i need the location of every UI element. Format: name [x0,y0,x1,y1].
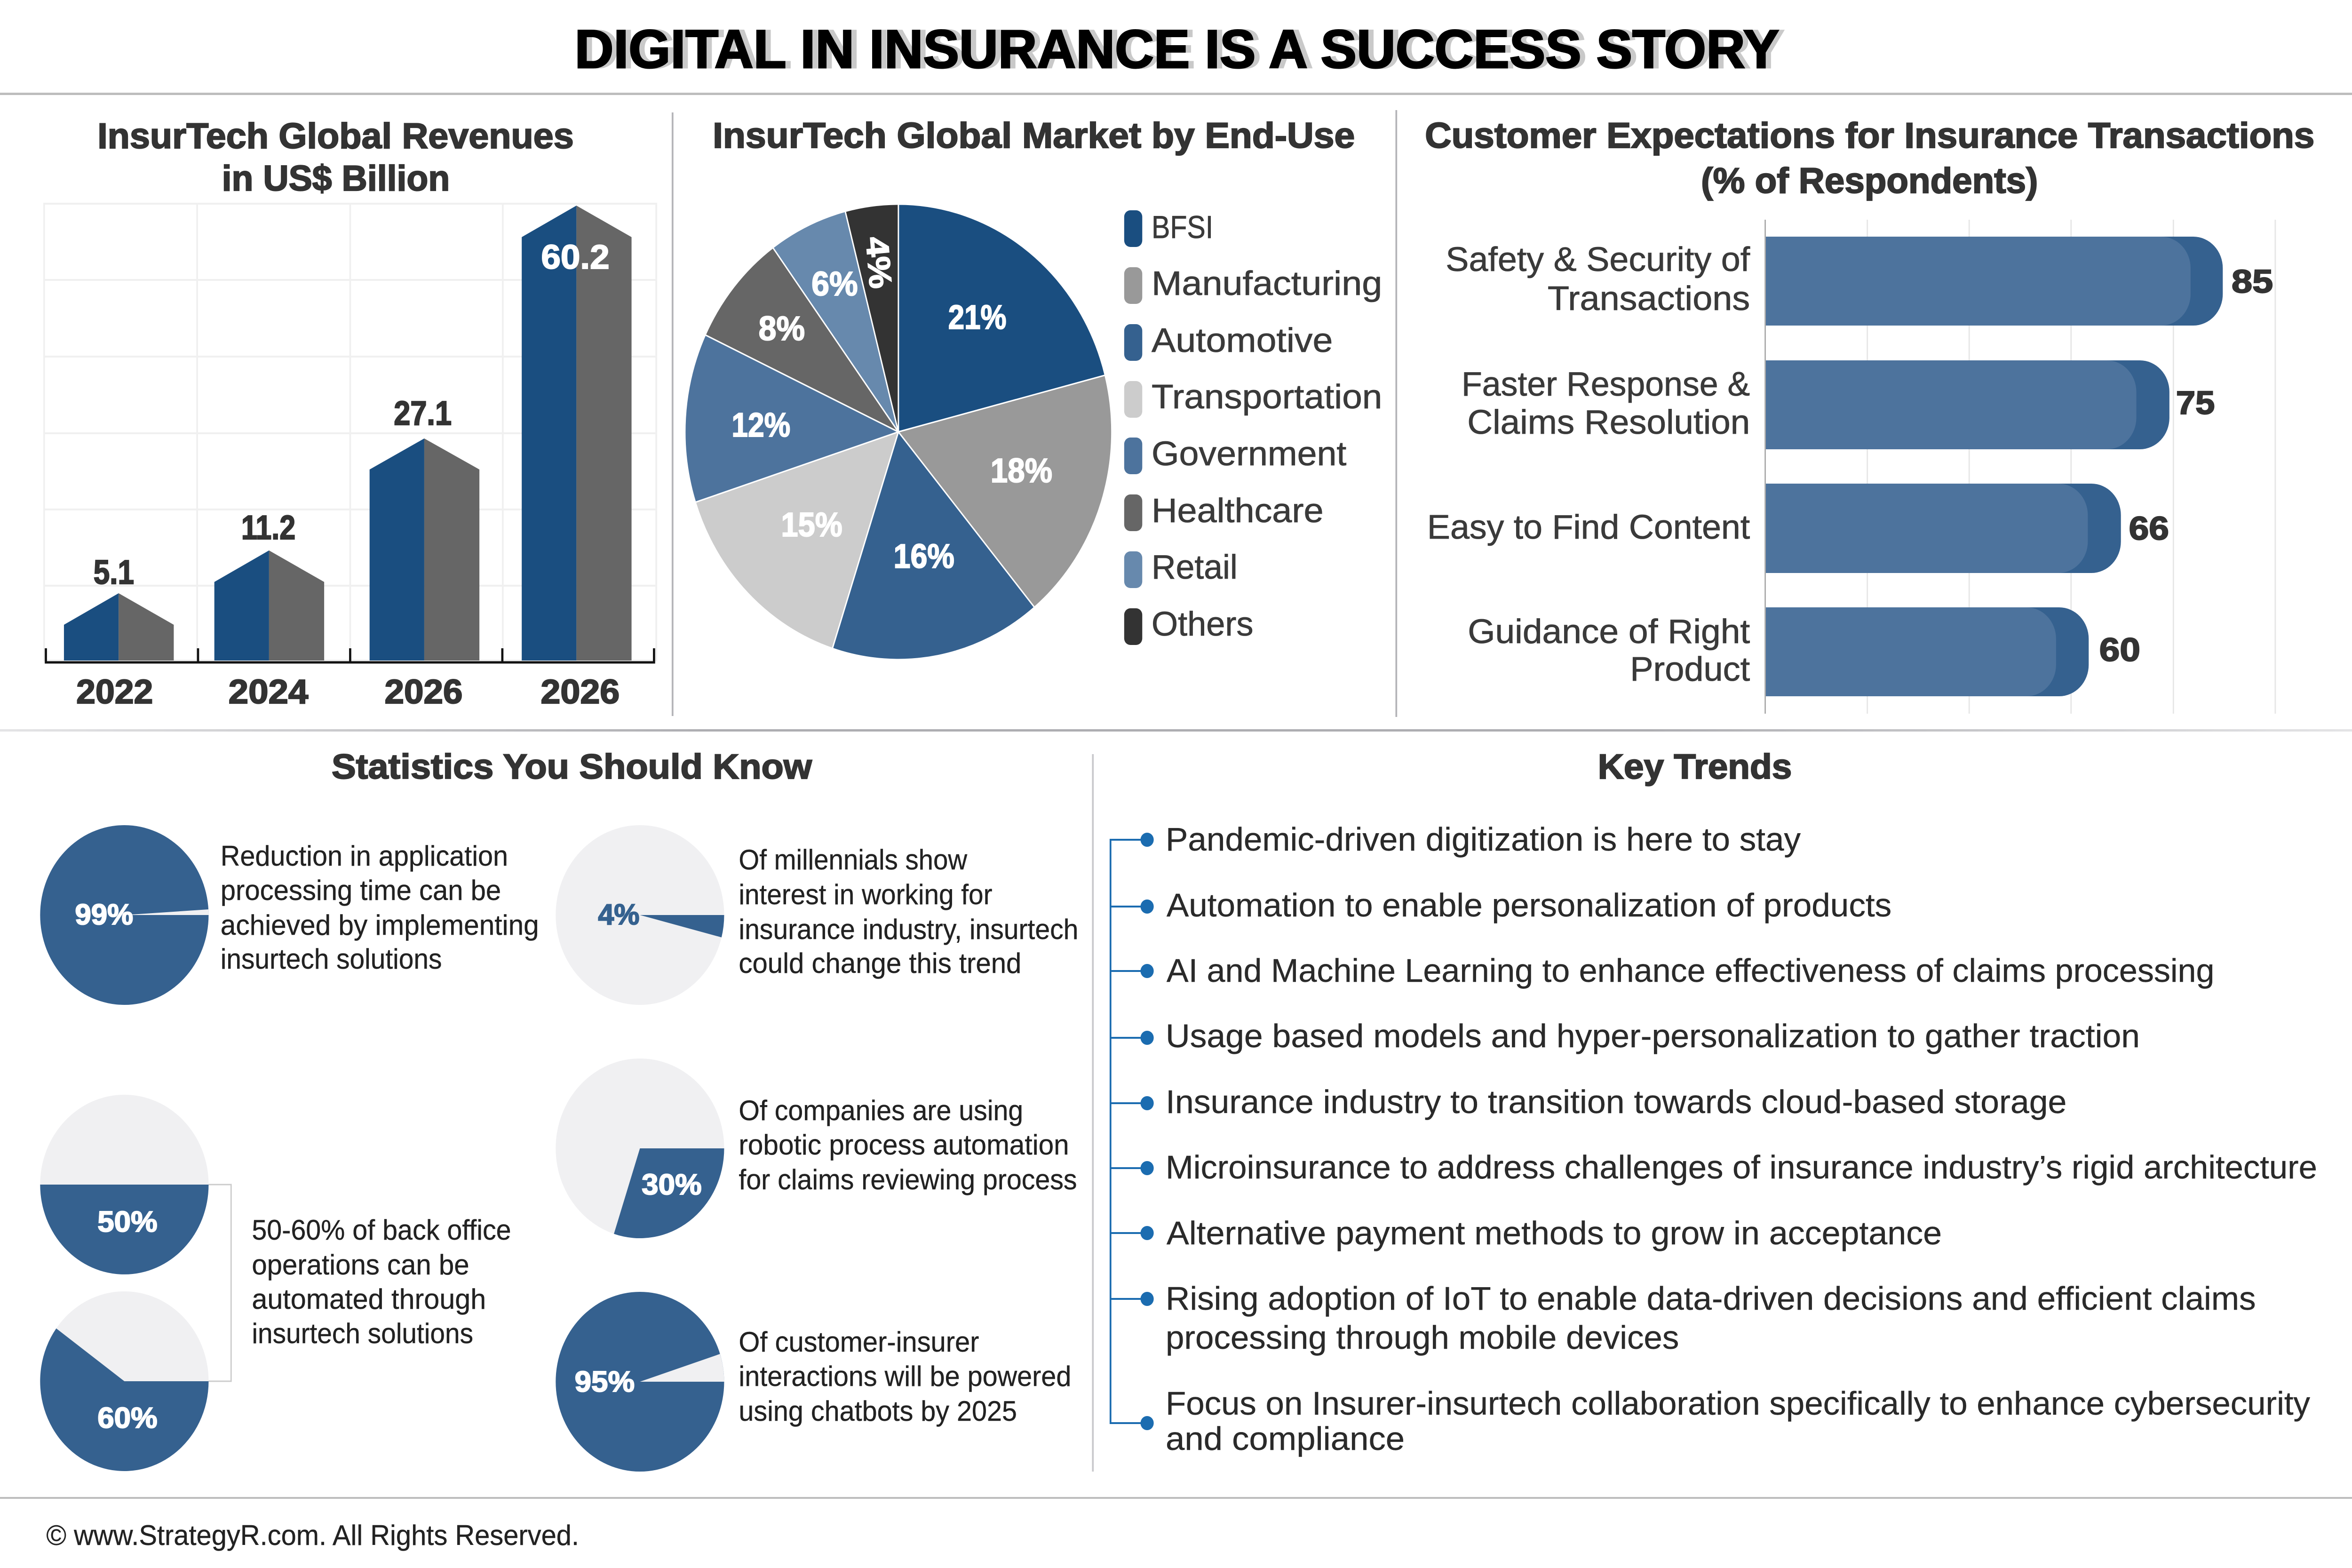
bar category labels: Claims Resolution [1467,403,1750,441]
trend list: and compliance [1166,1421,1405,1457]
panel: market by end-use [685,115,1382,660]
bar chart: revenues: 2026 [540,673,620,710]
bar category labels [1427,240,1750,688]
bar chart: revenues: 5.1 [94,553,134,591]
title: DIGITAL IN INSURANCE IS A SUCCESS STORY [575,19,1779,80]
stat: 95%: using chatbots by 2025 [739,1395,1017,1427]
stat: 95%: Of customer-insurer [739,1326,979,1358]
legend: BFSI [1152,209,1213,245]
horizontal bar chart: 75 [2176,385,2215,421]
bar category labels: Transactions [1548,279,1750,317]
pie labels: 6% [811,265,858,302]
panel: InsurTech global revenues [44,116,656,710]
heading: revenues [97,116,574,199]
footer copyright: © www.StrategyR.com. All Rights Reserved. [46,1520,579,1551]
stat: 95%: interactions will be powered [739,1361,1071,1392]
bar chart: revenues [46,206,654,710]
stat: 95% [556,1292,1071,1472]
stat: 4%: Of millennials show [739,844,968,876]
legend [1124,209,1382,645]
pie chart: end-use [685,204,1112,660]
stat: 99%: 99% [75,898,133,931]
stat: 4%: interest in working for [739,879,993,910]
bar chart: revenues: 60.2 [541,238,610,276]
legend: Manufacturing [1152,264,1382,302]
trend list: processing through mobile devices [1166,1320,1679,1356]
bar chart: revenues: 27.1 [394,394,452,432]
stat: 95%: 95% [575,1365,635,1398]
bullet connector [1111,833,1154,1430]
stat: 99%: achieved by implementing [221,909,539,941]
stat: 30% [556,1059,1077,1238]
heading: end-use: InsurTech Global Market by End-Use [713,115,1355,156]
stat: 99% [40,825,539,1005]
pie labels: 21% [948,298,1007,336]
trend list: AI and Machine Learning to enhance effectiveness of claims processing [1167,953,2214,989]
pie labels [731,235,1052,575]
pie labels: 18% [991,452,1052,489]
pie labels: 16% [893,537,954,575]
stat: 99%: Reduction in application [221,840,508,872]
stat: 4%: could change this trend [739,947,1021,979]
legend: Others [1152,605,1254,643]
panel: customer expectations [1425,115,2314,714]
bar chart: revenues: 2024 [229,673,309,710]
stat: 50-60%: insurtech solutions [252,1318,473,1349]
bar category labels: Faster Response & [1462,365,1750,403]
stat: 50-60%: 50% [97,1205,158,1238]
horizontal bar chart: 66 [2129,510,2169,547]
trend list: Usage based models and hyper-personalization to gather traction [1166,1018,2140,1054]
stat: 30%: robotic process automation [739,1129,1069,1161]
trend list [1166,821,2317,1457]
pie labels: 12% [731,406,790,444]
bar category labels: Easy to Find Content [1427,508,1750,546]
heading: revenues: in US$ Billion [222,158,450,199]
stat: 50-60%: operations can be [252,1249,469,1281]
stat: 50-60% [40,1095,511,1471]
trend list: Insurance industry to transition towards cloud-based storage [1166,1084,2066,1120]
trend list: Rising adoption of IoT to enable data-driven decisions and efficient claims [1166,1281,2256,1317]
horizontal bar chart: 85 [2232,263,2273,300]
bar category labels: Guidance of Right [1468,613,1750,650]
trend list: Pandemic-driven digitization is here to stay [1166,821,1801,858]
trend list: Automation to enable personalization of products [1167,887,1891,923]
panel: key trends [1111,748,2317,1457]
panel: statistics [40,748,1078,1472]
legend: Healthcare [1152,492,1324,529]
bar chart: revenues: 2026 [385,673,462,710]
legend: Transportation [1152,378,1382,415]
horizontal bar chart: 60 [2099,632,2140,668]
stat: 99%: processing time can be [221,875,501,906]
heading: statistics: Statistics You Should Know [332,748,812,787]
horizontal bar chart [1764,220,2273,714]
heading: revenues: InsurTech Global Revenues [97,116,574,156]
heading: key trends: Key Trends [1598,748,1792,787]
pie labels: 4% [859,235,898,290]
stat: 30%: 30% [642,1168,702,1201]
trend list: Alternative payment methods to grow in acceptance [1167,1215,1942,1251]
stat: 30%: for claims reviewing process [739,1164,1077,1195]
stat: 99%: insurtech solutions [221,943,442,975]
stat: 50-60%: 60% [97,1401,158,1434]
stat: 4%: 4% [598,898,639,931]
stat: 50-60%: automated through [252,1283,486,1315]
pie labels: 8% [759,310,805,347]
heading: customer expectations: (% of Respondents) [1701,160,2038,201]
title: DIGITAL IN INSURANCE IS A SUCCESS STORY [580,19,1784,80]
bar category labels: Product [1630,650,1750,688]
trend list: Microinsurance to address challenges of insurance industry’s rigid architecture [1166,1149,2317,1186]
stat: 30%: Of companies are using [739,1095,1023,1126]
heading: customer expectations [1425,115,2314,201]
trend list: Focus on Insurer-insurtech collaboration specifically to enhance cybersecurity [1166,1385,2310,1422]
pie labels: 15% [781,506,842,543]
heading: customer expectations: Customer Expectations for Insurance Transactions [1425,115,2314,156]
bar chart: revenues: 2022 [76,673,153,710]
bar chart: revenues: 11.2 [241,509,295,546]
legend: Government [1152,435,1346,472]
legend: Retail [1152,548,1238,586]
stat: 4%: insurance industry, insurtech [739,914,1078,945]
stat: 50-60%: 50-60% of back office [252,1214,511,1246]
stat: 4% [556,825,1078,1005]
legend: Automotive [1152,321,1333,359]
bar category labels: Safety & Security of [1446,240,1750,278]
